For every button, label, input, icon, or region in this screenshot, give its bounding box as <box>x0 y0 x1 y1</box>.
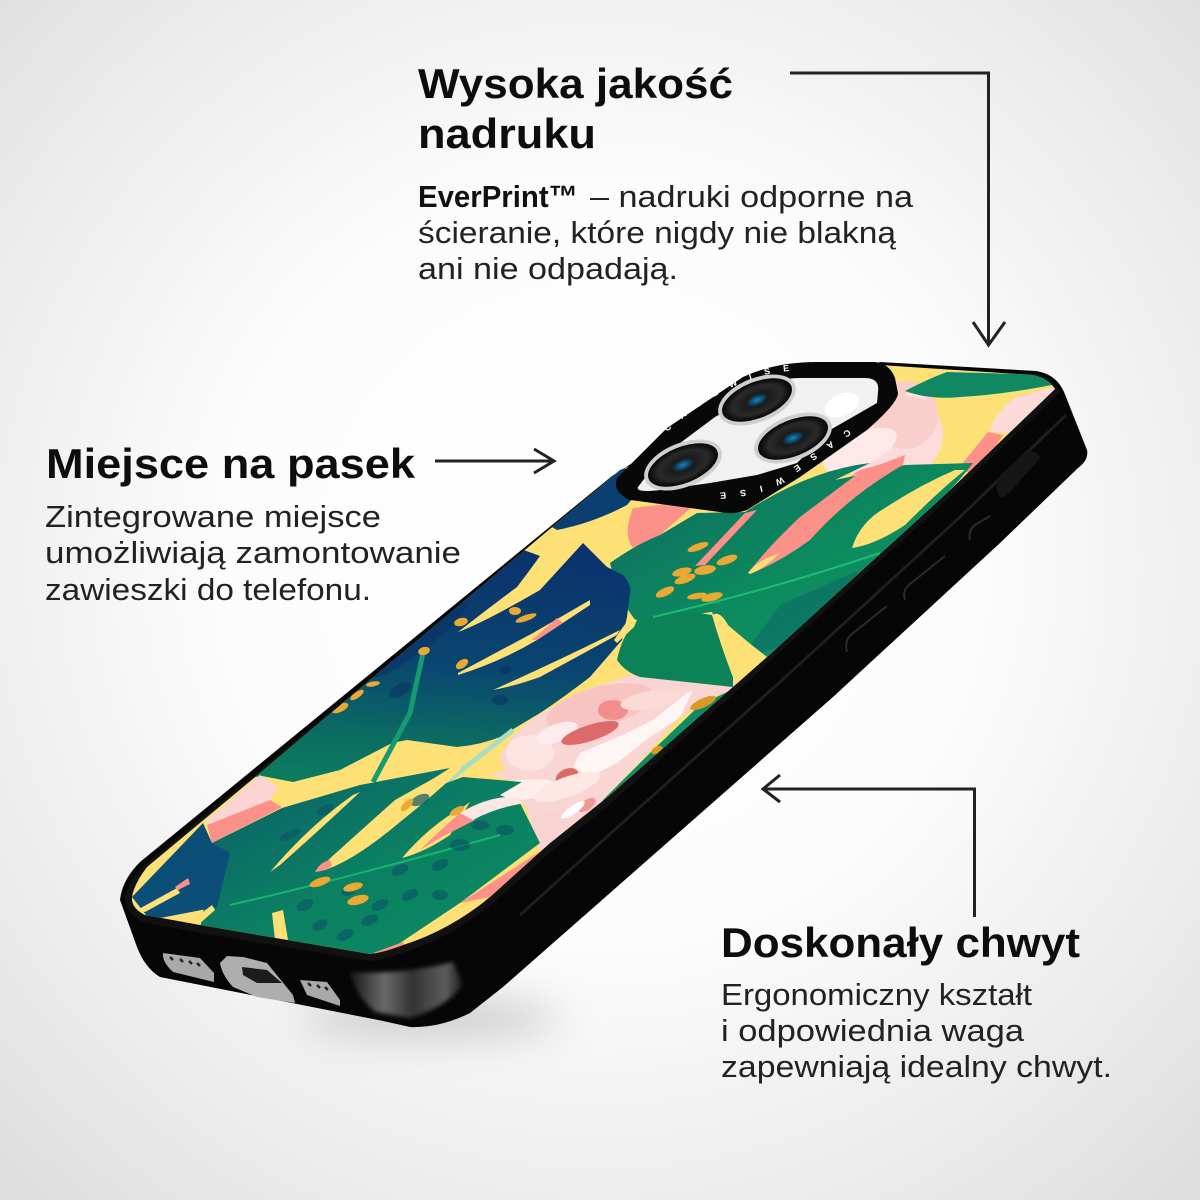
yellow finger <box>712 614 767 685</box>
thin salmon slit <box>695 510 757 566</box>
ring brand top: CASEWISE <box>666 364 789 430</box>
gold seeds <box>654 540 739 604</box>
slit yellow tip <box>748 553 780 574</box>
side highlight line <box>520 415 1066 915</box>
salmon patch under camera <box>628 504 691 548</box>
description: Zintegrowane miejsce <box>45 499 381 534</box>
bottom salmon and yellow wedge <box>460 843 560 903</box>
lens top <box>711 364 803 436</box>
right green band <box>1004 436 1006 438</box>
text block: strap slot <box>45 440 461 607</box>
charging port <box>220 956 295 1003</box>
arrow: top callout <box>790 73 1005 345</box>
camera ring <box>616 362 898 513</box>
description <box>45 499 461 607</box>
heading: Miejsce na pasek <box>46 440 416 487</box>
description <box>418 179 914 286</box>
flower near camera <box>823 381 943 478</box>
gold right of flower <box>652 696 716 754</box>
white petal <box>573 690 693 777</box>
yellow slit 2 <box>315 768 462 872</box>
side buttons <box>846 516 990 652</box>
green patch right of flower <box>602 690 730 802</box>
case rim <box>125 366 1060 961</box>
text block: grip <box>721 919 1112 1084</box>
small yellow stems <box>190 905 288 940</box>
bottom left salmon tip <box>175 878 190 890</box>
top right leaf <box>905 372 1052 398</box>
description: ścieranie, które nigdy nie blakną <box>418 215 897 250</box>
salmon slit <box>748 455 905 574</box>
heading: Wysoka jakość <box>418 60 733 107</box>
gold dots <box>308 797 466 907</box>
dark streaks <box>373 602 511 705</box>
arrow: bottom callout <box>763 775 974 917</box>
description: – nadruki odporne na <box>590 179 914 214</box>
big pink flower <box>490 674 743 850</box>
description: Ergonomiczny kształt <box>721 977 1032 1012</box>
description: zawieszki do telefonu. <box>45 572 371 607</box>
upper blue lobe near camera <box>552 468 632 530</box>
gold dots <box>330 607 537 715</box>
heading: nadruku <box>418 110 596 157</box>
red core <box>561 721 619 745</box>
large green leaf <box>610 455 973 687</box>
dark wash <box>752 570 860 653</box>
camera module <box>616 362 898 514</box>
left speaker <box>163 953 214 982</box>
red low <box>556 768 578 781</box>
description: EverPrint™ <box>418 179 578 214</box>
small pink flower <box>205 775 282 843</box>
description: zapewniają idealny chwyt. <box>721 1049 1112 1084</box>
side lump <box>996 451 1040 497</box>
ring brand lower: CASEWISE <box>720 430 850 499</box>
description: ani nie odpadają. <box>418 251 678 286</box>
camera window <box>638 378 878 491</box>
yellow base <box>132 365 1055 954</box>
yellow slit lower <box>493 630 620 690</box>
phone case <box>120 362 1087 1027</box>
green spotted leaf <box>200 768 540 958</box>
window flash <box>821 387 863 423</box>
description <box>721 977 1112 1084</box>
salmon section <box>532 618 563 640</box>
midrib <box>373 653 423 782</box>
description: i odpowiednia waga <box>721 1013 1025 1048</box>
spots <box>277 791 514 943</box>
salmon tip <box>315 860 332 872</box>
bottom left slit <box>137 888 180 912</box>
lower lobe <box>617 610 733 687</box>
yellow slit <box>852 470 965 548</box>
yellow slit upper <box>458 600 590 675</box>
printed back pattern <box>132 365 1055 954</box>
petal over slit <box>460 797 525 820</box>
salmon blob right <box>962 432 1003 472</box>
yellow slit 3 <box>402 802 470 858</box>
top right flower <box>990 386 1058 433</box>
lens right <box>747 402 839 474</box>
lens left <box>637 429 729 501</box>
blue monstera leaf <box>235 543 637 787</box>
upper petals <box>546 683 652 729</box>
midrib <box>230 835 500 905</box>
case body <box>120 362 1087 1027</box>
heading: Doskonały chwyt <box>721 919 1080 966</box>
text block: print quality <box>418 60 914 286</box>
bottom-left dark blue leaf <box>132 823 230 920</box>
pale stem <box>440 730 513 787</box>
phone shadow <box>300 1000 560 1036</box>
heading <box>418 60 733 157</box>
midrib <box>653 553 880 617</box>
corner gloss <box>350 962 463 1018</box>
right speaker <box>300 980 340 1006</box>
yellow lump <box>614 618 637 643</box>
description: umożliwiają zamontowanie <box>45 535 461 570</box>
salmon slit 3 <box>420 813 475 850</box>
lower petals <box>500 779 554 800</box>
yellow slit 1 <box>270 792 360 872</box>
arrow: left callout <box>435 449 554 473</box>
